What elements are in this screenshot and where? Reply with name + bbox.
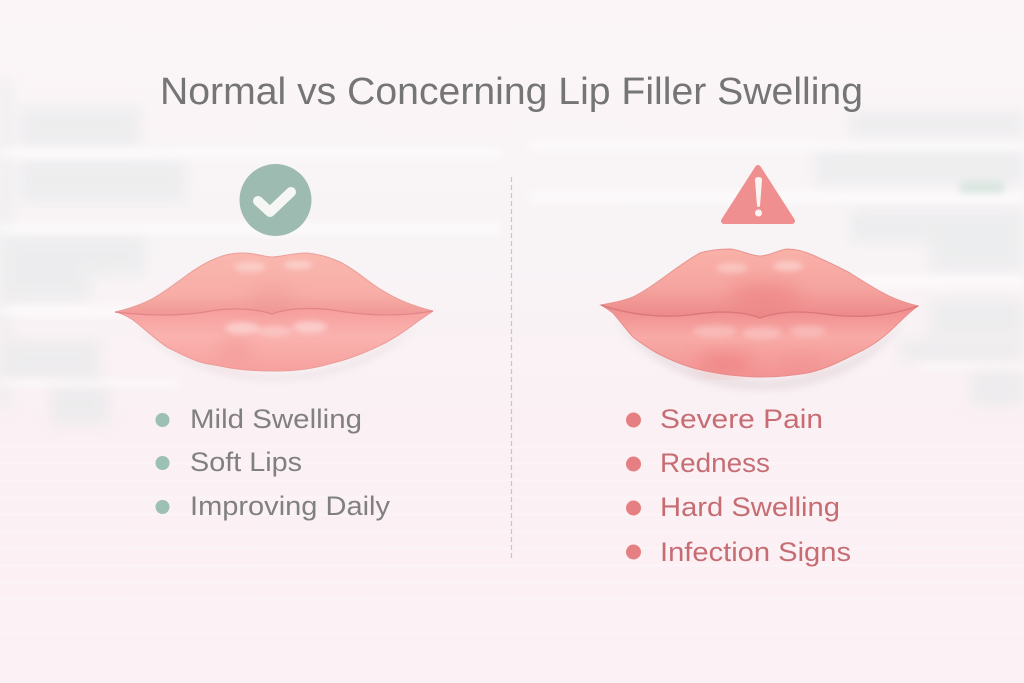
icon: warning triangle bbox=[724, 168, 792, 221]
illustration: swollen lips bbox=[601, 249, 918, 390]
icon: green check circle bbox=[240, 164, 312, 236]
item: Soft Lips: Soft Lips bbox=[190, 447, 302, 477]
panel: normal swelling bbox=[115, 164, 433, 521]
center dashed divider bbox=[510, 177, 512, 558]
item: Severe Pain: Severe Pain bbox=[660, 404, 823, 434]
list: normal symptoms bbox=[156, 404, 391, 521]
item: Infection Signs: Infection Signs bbox=[660, 537, 851, 567]
item: Mild Swelling: Mild Swelling bbox=[190, 404, 362, 434]
title: Normal vs Concerning Lip Filler Swelling bbox=[160, 71, 863, 113]
item: Improving Daily: Improving Daily bbox=[190, 491, 391, 521]
illustration: normal lips bbox=[115, 253, 433, 380]
item: Hard Swelling: Hard Swelling bbox=[660, 492, 840, 522]
list: concerning symptoms bbox=[626, 404, 851, 567]
panel: concerning swelling bbox=[601, 168, 918, 567]
item: Redness: Redness bbox=[660, 448, 770, 478]
